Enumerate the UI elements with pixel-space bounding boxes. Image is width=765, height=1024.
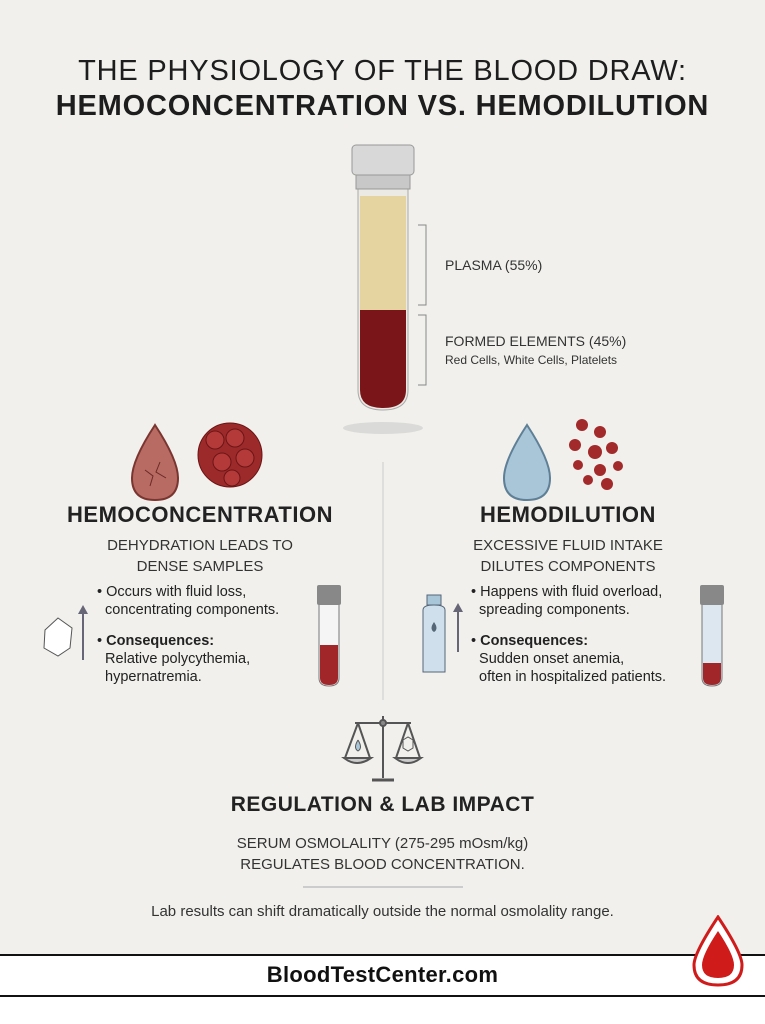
icon: balance scale: [344, 716, 421, 780]
panel: hemoconcentration: DENSE SAMPLES: [137, 558, 263, 575]
panel: hemodilution: often in hospitalized patients.: [479, 669, 666, 685]
text: Lab results can shift dramatically outside the normal osmolality range.: [151, 903, 614, 920]
panel: hemoconcentration: • Consequences:: [97, 633, 214, 649]
icon: small tube concentrated: [317, 585, 341, 686]
panel: regulation: SERUM OSMOLALITY (275-295 mOsm/kg): [237, 835, 528, 852]
tube labels: PLASMA (55%): [445, 257, 542, 273]
panel: regulation: REGULATION & LAB IMPACT: [231, 793, 534, 816]
title: HEMOCONCENTRATION VS. HEMODILUTION: [56, 90, 709, 122]
panel: hemodilution: HEMODILUTION: [480, 502, 656, 527]
icon: water bottle + arrow: [423, 595, 463, 672]
footer lines: [0, 954, 765, 956]
icon: dispersed cells: [569, 419, 623, 490]
panel: hemoconcentration: HEMOCONCENTRATION: [67, 502, 333, 527]
panel: hemoconcentration: [67, 502, 333, 685]
test tube: [343, 145, 426, 434]
panel: hemoconcentration: hypernatremia.: [105, 669, 202, 685]
panel: hemodilution: spreading components.: [479, 602, 630, 618]
panel: regulation: [151, 793, 614, 920]
icon: water drop: [504, 425, 550, 500]
title: [56, 55, 709, 122]
icon: salt crystal + arrow: [44, 605, 88, 660]
panel: hemoconcentration: • Occurs with fluid loss,: [97, 584, 246, 600]
panel: hemodilution: • Happens with fluid overload,: [471, 584, 662, 600]
panel: hemoconcentration: concentrating components.: [105, 602, 279, 618]
icon: dry blood drop: [132, 425, 178, 500]
panel: hemodilution: EXCESSIVE FLUID INTAKE: [473, 537, 663, 554]
icon: small tube diluted: [700, 585, 724, 686]
panel: hemoconcentration: DEHYDRATION LEADS TO: [107, 537, 293, 554]
panel: hemodilution: DILUTES COMPONENTS: [480, 558, 656, 575]
panel: hemoconcentration: Relative polycythemia,: [105, 651, 250, 667]
footer text: BloodTestCenter.com: [267, 962, 498, 987]
icon: clumped cells: [198, 423, 262, 487]
text: FORMED ELEMENTS (45%): [445, 333, 626, 349]
title: THE PHYSIOLOGY OF THE BLOOD DRAW:: [78, 55, 687, 87]
icon: logo drop: [692, 915, 744, 986]
panel: regulation: REGULATES BLOOD CONCENTRATION.: [240, 856, 525, 873]
panel: hemodilution: • Consequences:: [471, 633, 588, 649]
panel: hemodilution: Sudden onset anemia,: [479, 651, 624, 667]
text: Red Cells, White Cells, Platelets: [445, 353, 617, 367]
panel: hemodilution: [471, 502, 666, 685]
